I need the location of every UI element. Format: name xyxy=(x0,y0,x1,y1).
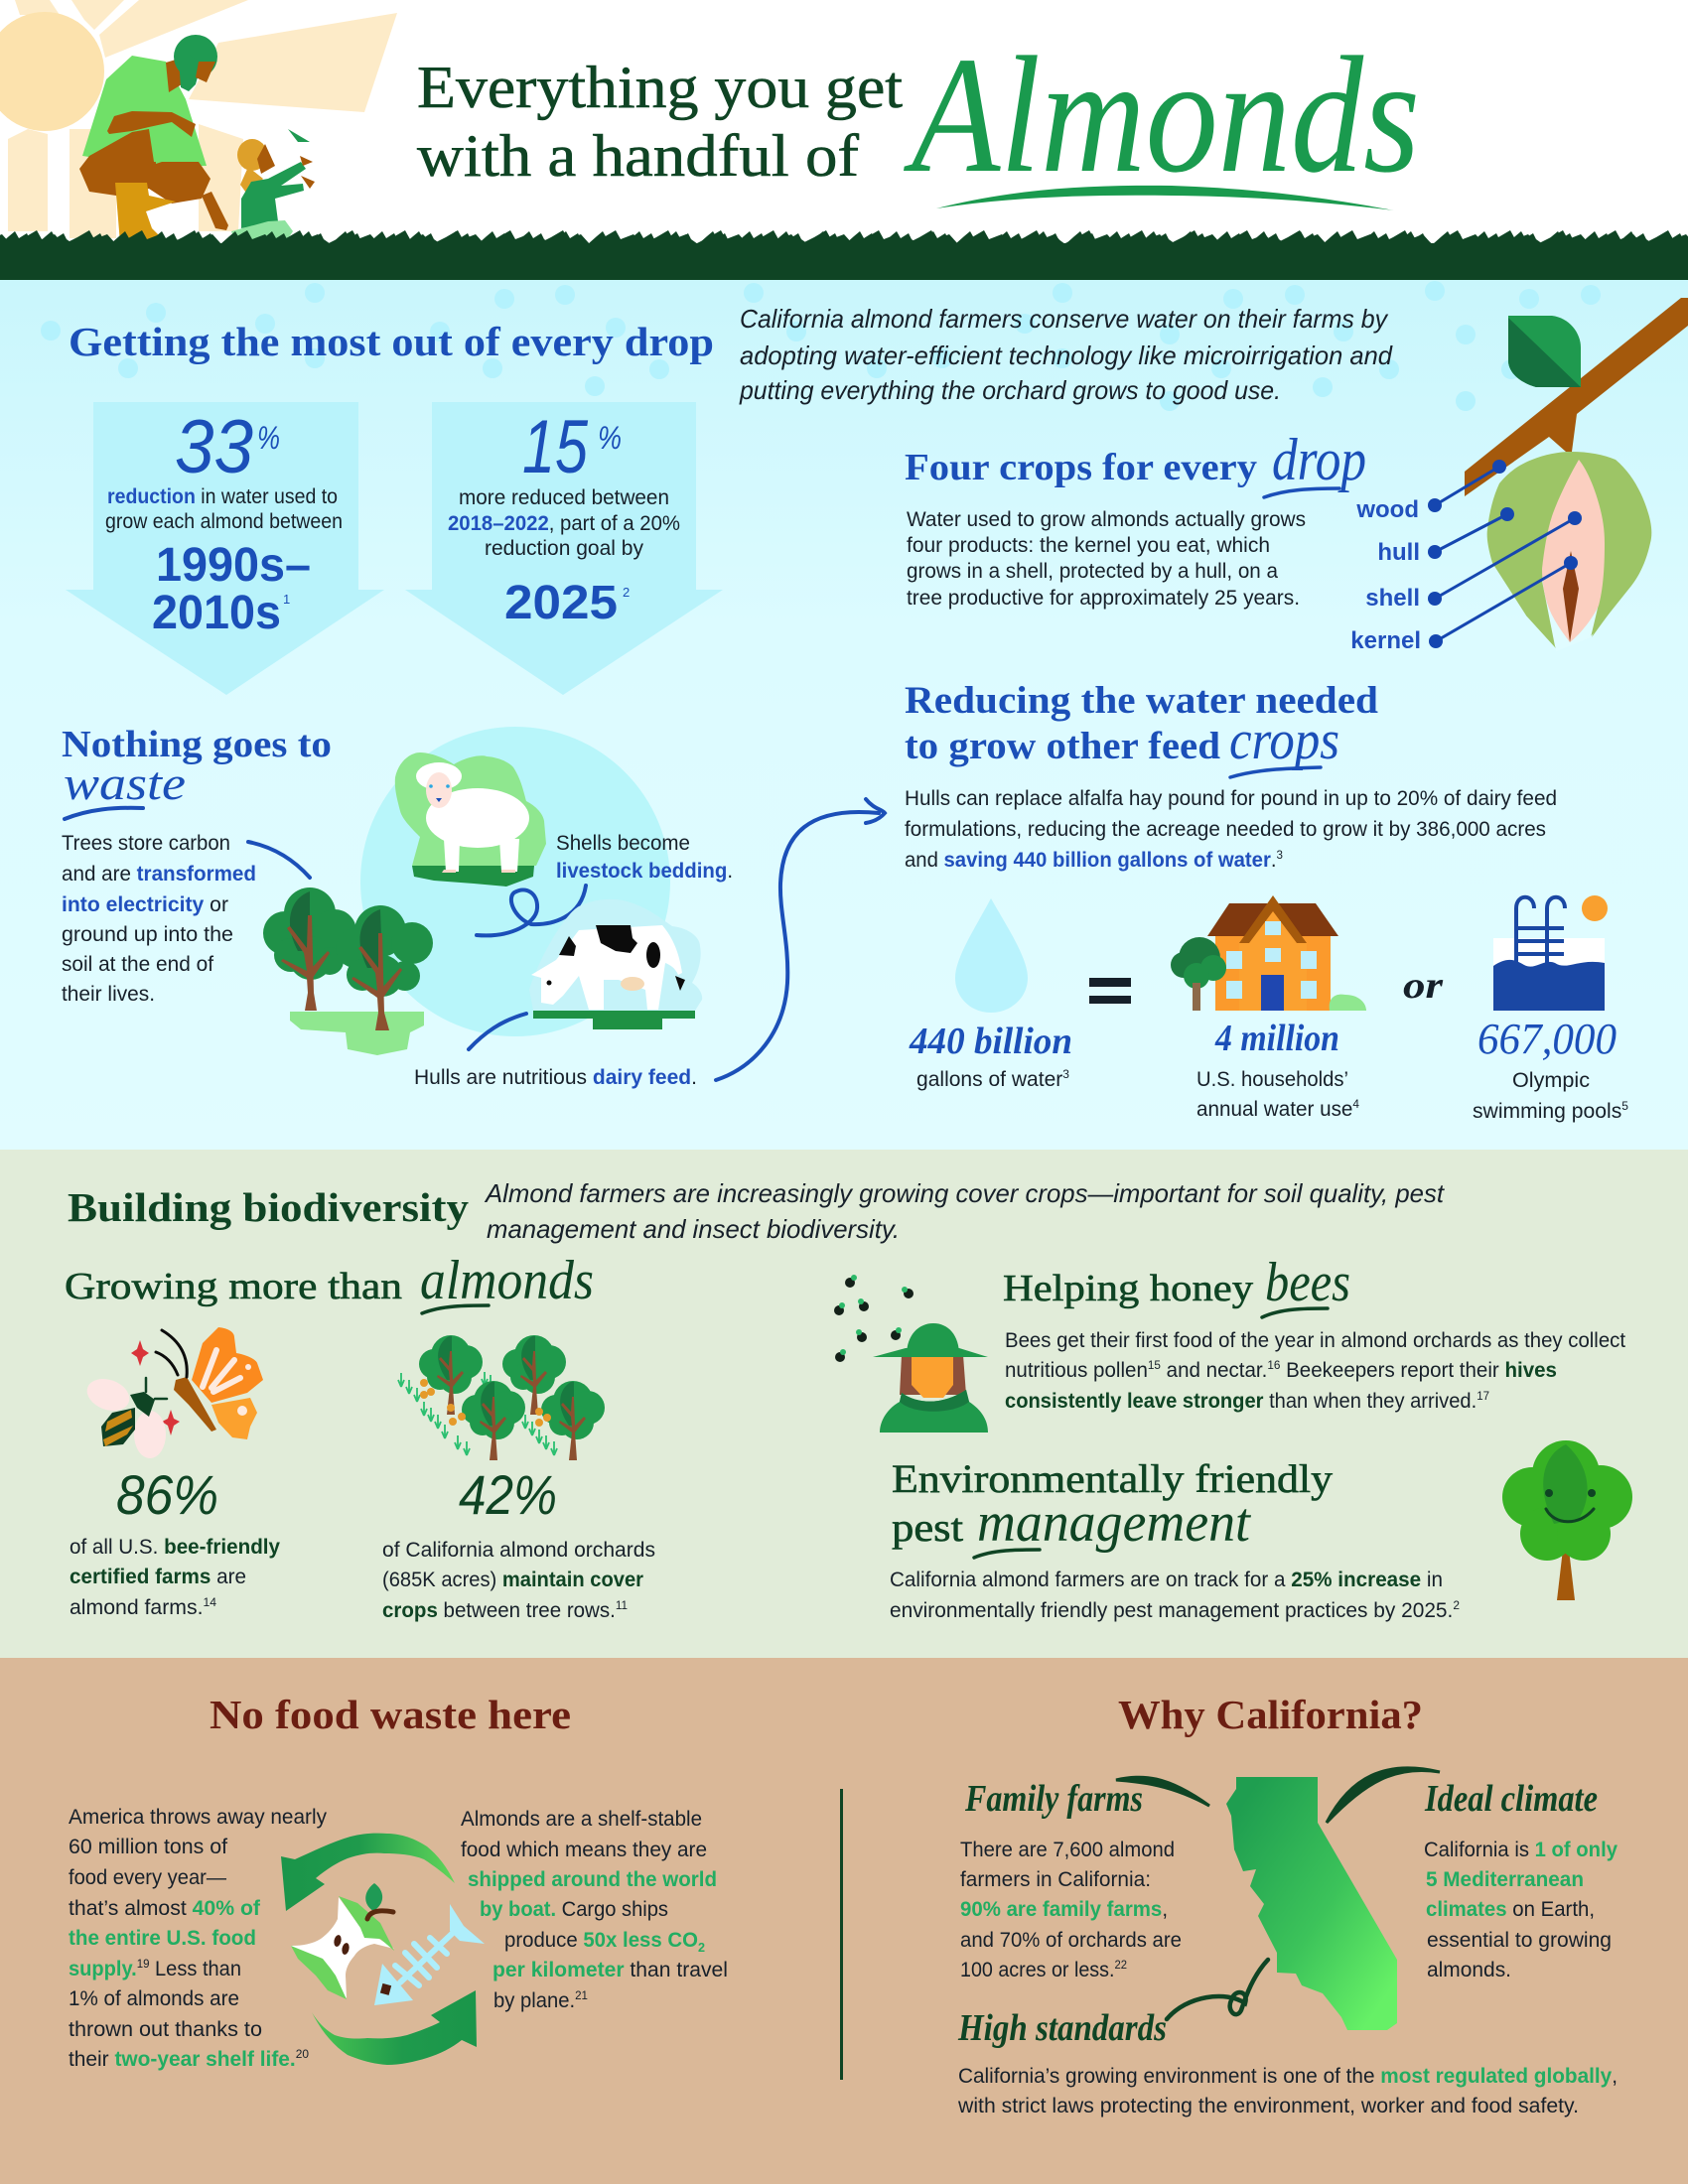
stat: 440 billion gallons: gallons of water xyxy=(916,1068,1062,1091)
text: four crops: four products: the kernel you eat, which xyxy=(907,534,1270,557)
text: reducing water: 3 xyxy=(1277,848,1283,862)
icon: apple core xyxy=(291,1883,394,1999)
icon: sun and rays xyxy=(0,0,397,238)
stat: 4 million households: annual water use xyxy=(1196,1098,1355,1121)
callout arrow: 33%: 1 xyxy=(283,592,290,607)
labels: almond parts: wood xyxy=(1355,496,1419,523)
text: trees xyxy=(62,832,256,1006)
heading: Why California?: Why California? xyxy=(1118,1692,1423,1737)
text: America throws away: Less than xyxy=(149,1958,241,1980)
text: reducing water: formulations, reducing the acreage needed to grow it by 386,000 acres xyxy=(905,818,1546,841)
stat: 86% xyxy=(70,1463,280,1619)
text: Almonds shelf-stable: 21 xyxy=(575,1988,588,2002)
labels: almond parts: kernel xyxy=(1350,627,1421,654)
labels: almond parts xyxy=(1350,496,1421,654)
callout arrow: 15% xyxy=(405,402,723,695)
arrow: cycle top xyxy=(281,1834,455,1911)
stat: 4 million households: U.S. households’ xyxy=(1196,1068,1348,1091)
heading: Nothing goes to waste xyxy=(62,724,332,819)
block: High standards xyxy=(957,1960,1618,2117)
block: Family farms: farmers in California: xyxy=(960,1868,1151,1891)
stat: 4 million households xyxy=(1171,895,1366,1121)
stat: 42%: crops between tree rows. xyxy=(382,1599,620,1622)
text: four crops: grows in a shell, protected by a hull, on a xyxy=(907,560,1278,583)
block: Ideal climate: Ideal climate xyxy=(1424,1778,1598,1820)
text: reducing water: Hulls can replace alfalfa hay pound for pound in up to 20% of dairy feed xyxy=(905,787,1557,810)
heading: Helping honey bees: bees xyxy=(1265,1252,1350,1313)
text: trees: and are transformed xyxy=(62,863,256,886)
callout arrow: 33%: 33 xyxy=(175,405,253,489)
callout arrow: 33%: grow each almond between xyxy=(105,510,343,533)
stat: 42%: 42% xyxy=(459,1463,557,1526)
text: trees: soil at the end of xyxy=(62,953,213,976)
text: honey bees: Bees get their first food of the year in almond orchards as they collect xyxy=(1005,1329,1625,1352)
block: High standards: with strict laws protecting the environment, worker and food safety. xyxy=(957,2095,1579,2117)
stat: 440 billion gallons: 3 xyxy=(1062,1067,1069,1081)
icon: equals xyxy=(1089,978,1131,1004)
text: America throws away: 1% of almonds are xyxy=(69,1987,239,2010)
background droplets xyxy=(41,281,1601,411)
text: honey bees: consistently leave stronger than when they arrived. xyxy=(1005,1390,1486,1413)
text: America throws away: 19 xyxy=(137,1957,150,1971)
stat: 4 million households: 4 xyxy=(1352,1097,1359,1111)
block: Ideal climate: 5 Mediterranean xyxy=(1426,1868,1584,1891)
stat: 42%: (685K acres) maintain cover xyxy=(382,1569,643,1591)
heading: Getting the most out of every drop: Getting the most out of every drop xyxy=(69,319,714,364)
text: Almonds shelf-stable: 2 xyxy=(698,1940,705,1955)
text: America throws away: 60 million tons of xyxy=(69,1836,227,1858)
callout arrow: 15%: reduction goal by xyxy=(485,537,643,560)
text: four crops: tree productive for approximately 25 years. xyxy=(907,587,1300,610)
intro text: adopting water-efficient technology like microirrigation and xyxy=(740,341,1394,370)
stat: 667,000 Olympic pools: 5 xyxy=(1621,1099,1628,1113)
stat: 667,000 Olympic pools: Olympic xyxy=(1512,1069,1590,1092)
panel: biodiversity section xyxy=(0,1150,1688,1658)
labels: almond parts: hull xyxy=(1377,539,1420,566)
block: Family farms: There are 7,600 almond xyxy=(960,1839,1175,1861)
stat: 4 million households: 4 million xyxy=(1214,1018,1339,1059)
block: Ideal climate: California is 1 of only xyxy=(1424,1839,1618,1861)
text: shells: livestock bedding. xyxy=(556,860,733,883)
divider xyxy=(840,1789,843,2080)
callout arrow: 15%: 2025 xyxy=(504,577,618,629)
text: America throws away: supply. xyxy=(69,1958,137,1980)
icon: trees on ground xyxy=(263,887,433,1055)
text: America throws away: food every year— xyxy=(69,1866,226,1889)
intro text: California almond farmers conserve water on their farms by xyxy=(740,304,1389,334)
block: Ideal climate: climates on Earth, xyxy=(1426,1898,1595,1921)
arrow: hulls short xyxy=(469,1014,526,1049)
text: America throws away: thrown out thanks to xyxy=(69,2018,262,2041)
text: America throws away xyxy=(69,1806,327,2071)
text: America throws away: the entire U.S. food xyxy=(69,1927,256,1950)
intro text xyxy=(484,1178,1446,1244)
map: California xyxy=(1226,1777,1397,2030)
intro text: putting everything the orchard grows to good use. xyxy=(739,375,1281,405)
text: Almonds shelf-stable: produce 50x less CO xyxy=(504,1929,701,1952)
text: hulls: Hulls are nutritious dairy feed. xyxy=(414,1066,697,1089)
text: trees: into electricity or xyxy=(62,893,228,916)
heading: Four crops for every drop: drop xyxy=(1272,427,1366,492)
grass border xyxy=(0,230,1688,280)
heading: No food waste here: No food waste here xyxy=(210,1692,571,1737)
stat: 42% xyxy=(382,1463,655,1622)
heading: Helping honey bees: Helping honey xyxy=(1003,1268,1253,1309)
icon: orchard with cover crops xyxy=(398,1335,605,1460)
block: Family farms: Family farms xyxy=(964,1778,1143,1820)
arrow: cycle bottom xyxy=(312,1990,477,2065)
heading: Reducing the water needed: crops xyxy=(1229,710,1339,771)
stat: 440 billion gallons xyxy=(909,898,1072,1091)
text: honey bees: 16 xyxy=(1267,1358,1281,1372)
labels: almond parts: shell xyxy=(1365,585,1420,612)
stat: 86%: almond farms. xyxy=(70,1596,202,1619)
heading: Environmentally friendly pest management: pest xyxy=(892,1505,963,1550)
block: Family farms: 22 xyxy=(1114,1958,1127,1972)
title: Almonds script: Almonds xyxy=(903,23,1420,207)
text: honey bees: 17 xyxy=(1477,1389,1489,1403)
stat: 86%: of all U.S. bee-friendly xyxy=(70,1536,280,1559)
text: honey bees: Beekeepers report their xyxy=(1280,1359,1504,1382)
heading: Nothing goes to waste: Nothing goes to xyxy=(62,724,332,765)
callout arrow: 33% xyxy=(66,402,384,695)
text: trees: ground up into the xyxy=(62,923,233,946)
intro text xyxy=(739,304,1394,405)
heading: Four crops for every drop: Four crops for every xyxy=(905,447,1257,488)
intro text: management and insect biodiversity. xyxy=(487,1214,900,1244)
stat: 440 billion gallons: 440 billion xyxy=(909,1021,1072,1062)
heading: Growing more than almonds: Growing more than xyxy=(65,1266,402,1307)
text: Almonds shelf-stable: Almonds are a shelf-stable xyxy=(461,1808,702,1831)
callout arrow: 33%: 1990s– xyxy=(156,539,311,592)
heading: Reducing the water needed: to grow other feed xyxy=(905,725,1220,767)
icon: branch and almond xyxy=(1428,298,1688,651)
heading: Nothing goes to waste: waste xyxy=(64,757,186,810)
text: pest management: California almond farmers are on track for a 25% increase in xyxy=(890,1569,1443,1591)
text: America throws away: that’s almost 40% of xyxy=(69,1897,261,1920)
block: High standards: High standards xyxy=(957,2007,1167,2049)
stat: 667,000 Olympic pools: swimming pools xyxy=(1473,1100,1620,1123)
text: honey bees: nutritious pollen xyxy=(1005,1359,1151,1382)
circle backdrop xyxy=(360,727,670,1036)
text: trees: Trees store carbon xyxy=(62,832,230,855)
text: honey bees: hives xyxy=(1504,1359,1557,1382)
text: pest management: 2 xyxy=(1453,1598,1460,1612)
text: reducing water: and saving 440 billion gallons of water. xyxy=(905,849,1282,872)
heading: Reducing the water needed xyxy=(905,679,1378,777)
panel: bottom section xyxy=(0,1658,1688,2184)
callout arrow: 15%: 15 xyxy=(522,405,589,489)
text: honey bees: 15 xyxy=(1148,1358,1161,1372)
icon: beekeeper xyxy=(873,1323,988,1433)
intro text: Almond farmers are increasingly growing cover crops—important for soil quality, pest xyxy=(484,1178,1446,1208)
title xyxy=(417,55,903,189)
heading: Environmentally friendly pest management: Environmentally friendly xyxy=(892,1456,1333,1501)
stat: 667,000 Olympic pools xyxy=(1473,895,1628,1123)
callout arrow: 33%: reduction in water used to xyxy=(107,485,338,508)
stat: 86%: 14 xyxy=(203,1595,216,1609)
icon: sheep xyxy=(395,752,546,887)
callout arrow: 15%: % xyxy=(598,420,622,456)
text: four crops xyxy=(907,508,1306,610)
heading: Environmentally friendly pest management: management xyxy=(977,1492,1251,1554)
panel: header xyxy=(0,0,1688,280)
block: Ideal climate: essential to growing xyxy=(1427,1929,1612,1952)
block: Family farms: and 70% of orchards are xyxy=(960,1929,1182,1952)
text: shells: Shells become xyxy=(556,832,690,855)
panel: water section xyxy=(0,280,1688,1150)
text: trees: their lives. xyxy=(62,983,155,1006)
heading: Growing more than almonds xyxy=(65,1250,594,1313)
callout arrow: 15%: 2 xyxy=(623,585,630,600)
icon: farmer and child xyxy=(79,35,315,243)
block: Family farms: 100 acres or less. xyxy=(960,1959,1125,1981)
text: pest management xyxy=(890,1569,1460,1622)
title: with a handful of xyxy=(417,123,859,189)
text: or: or xyxy=(1403,965,1444,1007)
text: Almonds shelf-stable: food which means they are xyxy=(461,1839,707,1861)
block: Ideal climate xyxy=(1327,1768,1618,1981)
icon: bees swarm xyxy=(834,1275,914,1362)
stat: 667,000 Olympic pools: 667,000 xyxy=(1477,1015,1617,1063)
icon: bee and butterfly xyxy=(82,1327,263,1458)
text: Almonds shelf-stable: per kilometer than travel xyxy=(492,1959,728,1981)
text: reducing water xyxy=(905,787,1557,872)
arrow: shells loop xyxy=(477,886,586,935)
text: America throws away: their two-year shelf life. xyxy=(69,2048,297,2071)
heading: Reducing the water needed: Reducing the water needed xyxy=(905,679,1378,722)
callout arrow: 15%: 2018–2022, part of a 20% xyxy=(448,512,680,535)
text: shells xyxy=(556,832,733,883)
stat: 86%: certified farms are xyxy=(70,1566,246,1588)
heading: Growing more than almonds: almonds xyxy=(420,1250,594,1311)
title: Everything you get xyxy=(417,55,903,120)
icon: cow xyxy=(529,899,702,1029)
arrow: long curve to feed crops xyxy=(716,799,885,1080)
text: honey bees xyxy=(1005,1329,1625,1413)
block: Family farms: 90% are family farms, xyxy=(960,1898,1168,1921)
block: Family farms xyxy=(960,1777,1209,1981)
heading: Four crops for every drop xyxy=(905,427,1366,497)
stat: 42%: 11 xyxy=(616,1598,628,1612)
stat: 42%: of California almond orchards xyxy=(382,1539,655,1562)
heading: Building biodiversity: Building biodiversity xyxy=(68,1184,470,1230)
text: Almonds shelf-stable xyxy=(461,1808,728,2012)
arrow: trees callout xyxy=(248,842,310,878)
callout arrow: 33%: % xyxy=(257,420,280,456)
text: four crops: Water used to grow almonds actually grows xyxy=(907,508,1306,531)
text: Almonds shelf-stable: by plane. xyxy=(493,1989,578,2012)
block: High standards: California’s growing environment is one of the most regulated globally, xyxy=(958,2065,1618,2088)
heading: Environmentally friendly pest management xyxy=(892,1456,1333,1558)
text: Almonds shelf-stable: shipped around the world xyxy=(468,1868,717,1891)
text: Almonds shelf-stable: by boat. Cargo ships xyxy=(480,1898,668,1921)
icon: smiling tree xyxy=(1502,1440,1632,1600)
stat: 86%: 86% xyxy=(116,1463,218,1526)
callout arrow: 15%: more reduced between xyxy=(459,486,669,509)
heading: Helping honey bees xyxy=(1003,1252,1350,1317)
icon: fish skeleton xyxy=(374,1904,485,2005)
text: America throws away: America throws away nearly xyxy=(69,1806,327,1829)
text: honey bees: and nectar. xyxy=(1161,1359,1267,1382)
block: Ideal climate: almonds. xyxy=(1427,1959,1511,1981)
text: pest management: environmentally friendly pest management practices by 2025. xyxy=(890,1599,1457,1622)
text: America throws away: 20 xyxy=(296,2047,309,2061)
callout arrow: 33%: 2010s xyxy=(152,587,281,639)
